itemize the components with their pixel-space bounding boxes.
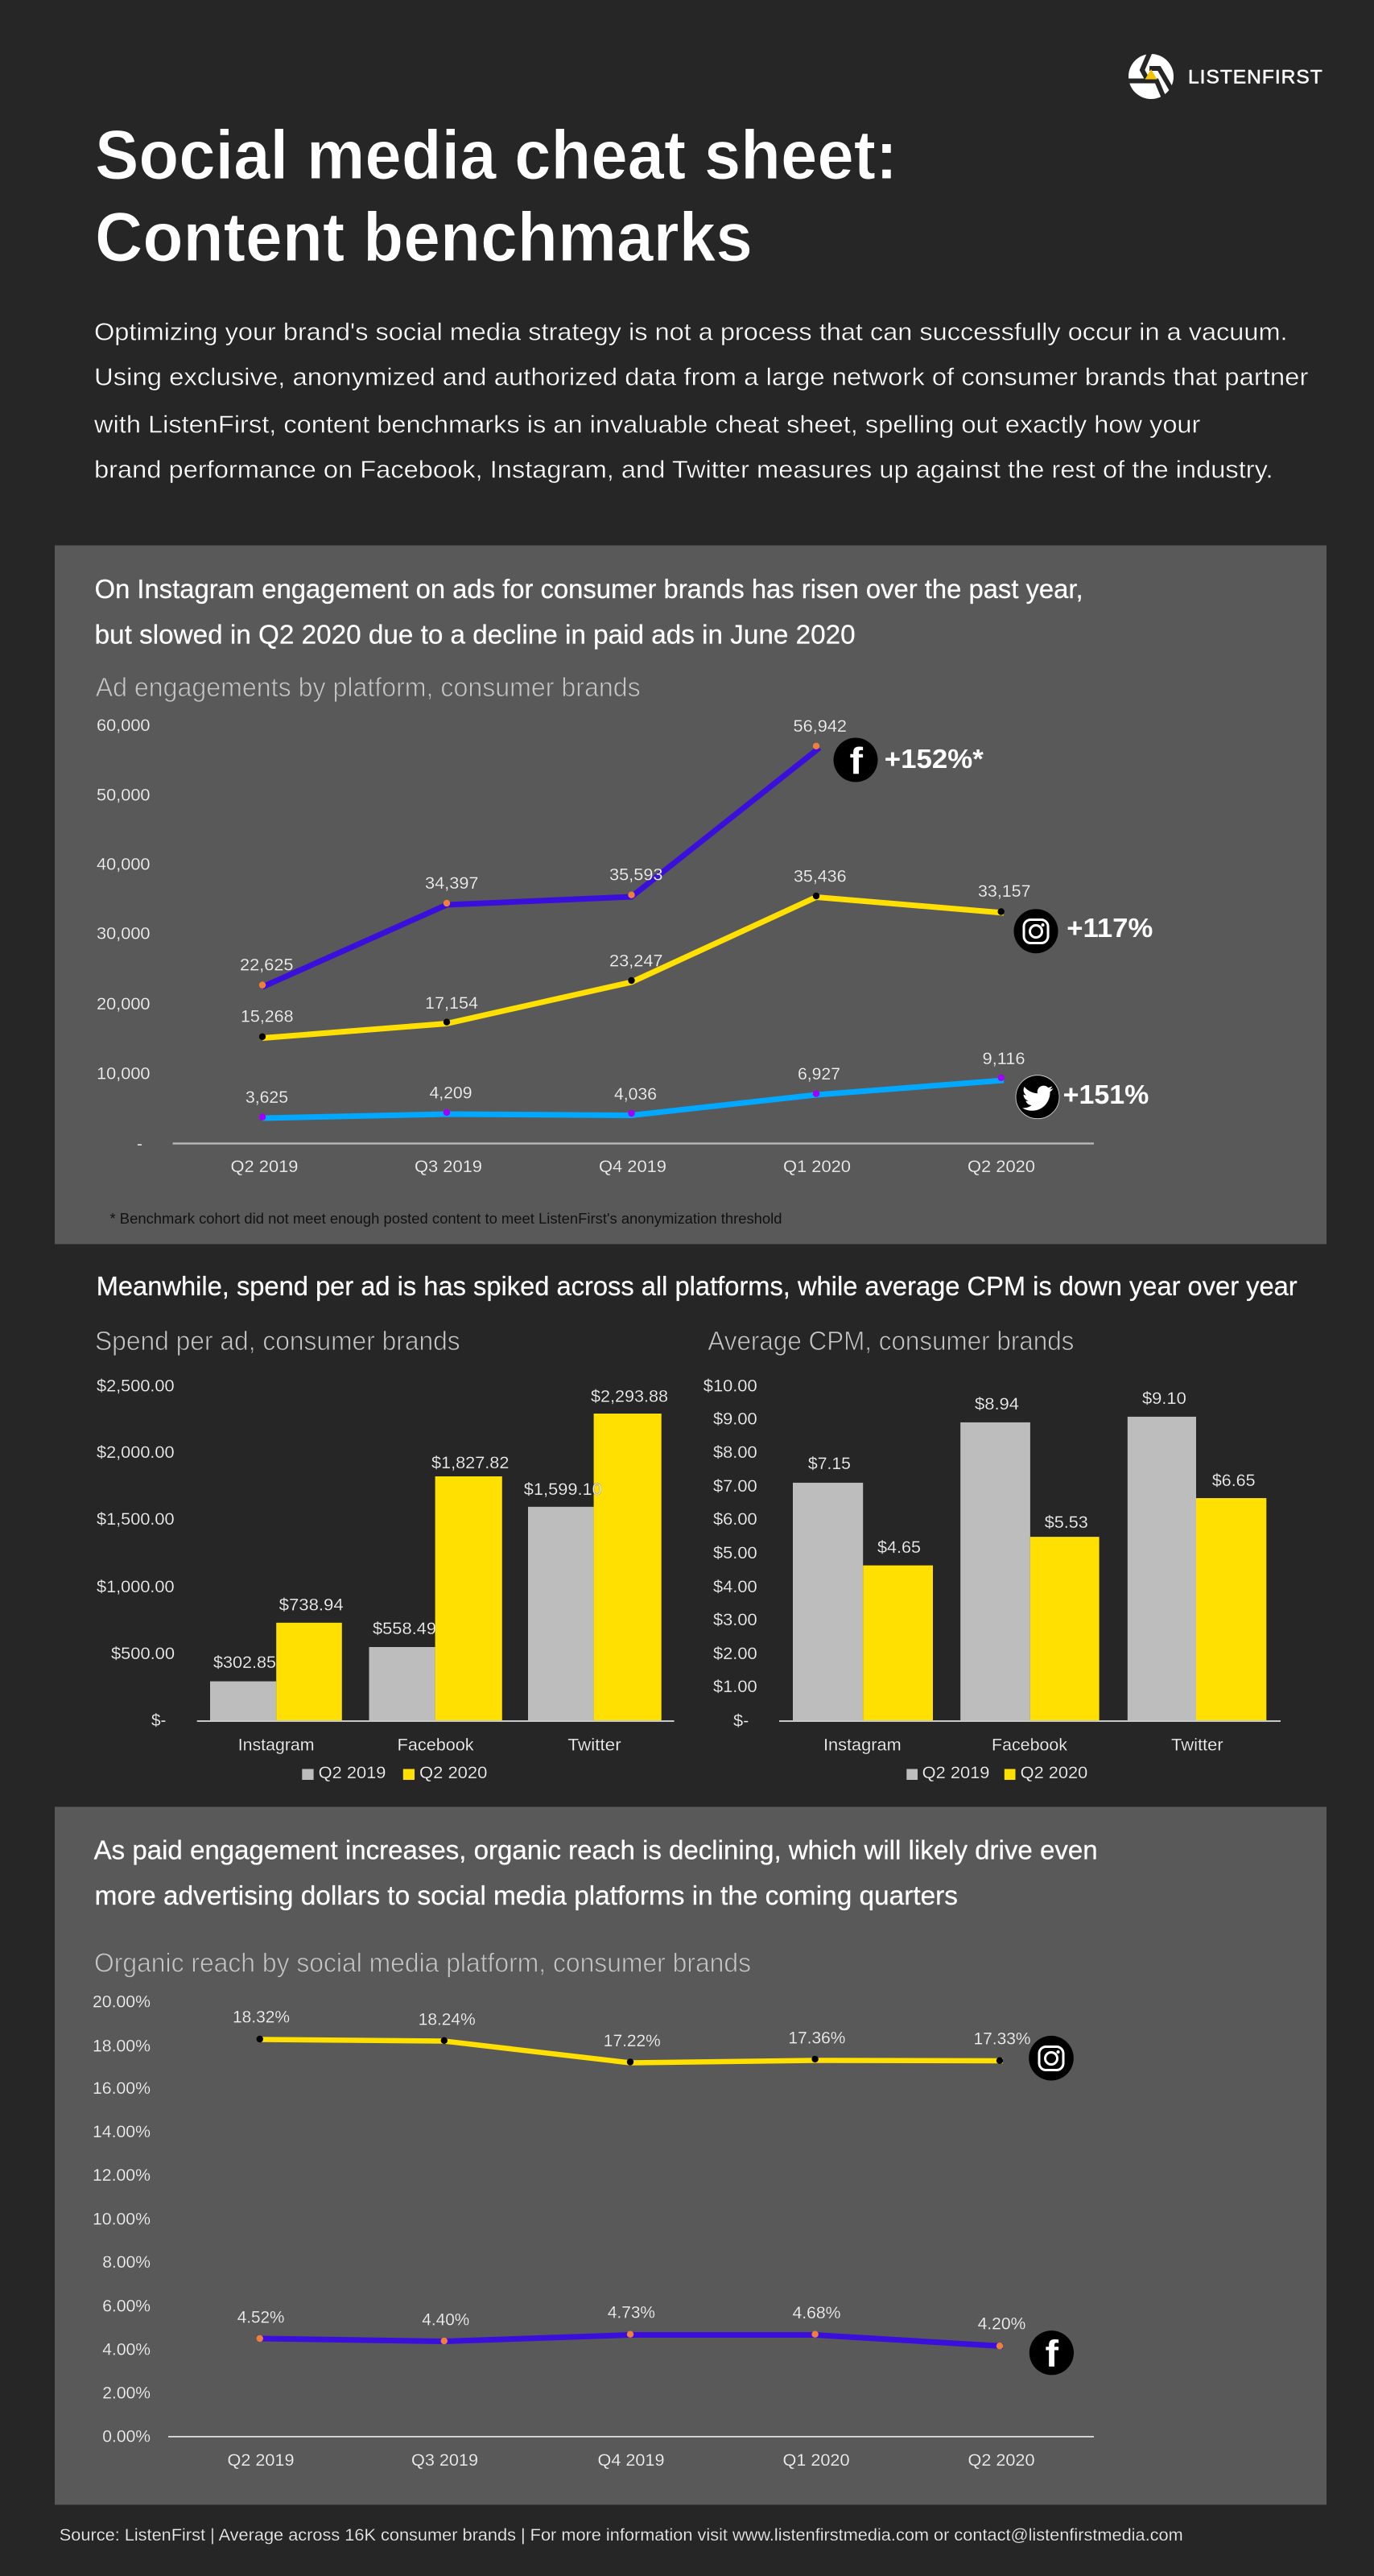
data labels: 4.40% [422, 2310, 469, 2330]
chart: spend per ad [95, 1326, 675, 1782]
icon: Instagram badge [1029, 2036, 1074, 2080]
data labels: 4,036 [614, 1085, 657, 1104]
data labels: 4.68% [792, 2304, 840, 2322]
category labels: Twitter [567, 1736, 621, 1755]
panel heading: On Instagram engagement on ads for consumer brands has risen over the past year, [95, 574, 1083, 604]
y axis labels: 10,000 [97, 1064, 150, 1084]
x axis labels: Q4 2019 [599, 1158, 666, 1176]
x axis labels [230, 1158, 1035, 1176]
logo: ListenFirst [1126, 52, 1322, 100]
data labels: 4.20% [978, 2315, 1025, 2333]
y axis labels: $2.00 [713, 1645, 757, 1663]
data labels: $558.49 [373, 1620, 436, 1638]
x axis labels: Q2 2019 [230, 1158, 298, 1176]
y axis labels: $1.00 [713, 1678, 757, 1696]
y axis labels: $10.00 [704, 1377, 757, 1395]
chart subtitle: Average CPM, consumer brands [708, 1326, 1074, 1356]
data labels: $2,293.88 [591, 1387, 668, 1406]
chart subtitle: Spend per ad, consumer brands [95, 1326, 460, 1356]
series: Facebook line [259, 743, 819, 989]
wordmark: LISTENFIRST [1188, 66, 1322, 88]
data labels: 4.52% [237, 2309, 284, 2326]
legend: Q2 2020 [1021, 1764, 1087, 1782]
data labels: 4.73% [608, 2304, 655, 2322]
category labels: Instagram [238, 1736, 315, 1755]
data labels: 3,625 [246, 1088, 288, 1107]
series: Instagram line [257, 2036, 1003, 2066]
x axis labels: Q2 2019 [227, 2451, 295, 2470]
icon: shutter mark [1126, 52, 1174, 100]
y axis labels: $4.00 [713, 1578, 757, 1596]
x axis labels: Q3 2019 [411, 2451, 478, 2470]
series: Facebook line [257, 2331, 1003, 2349]
title: Social media cheat sheet: [95, 117, 897, 194]
legend: Q2 2020 [419, 1764, 487, 1782]
y axis labels: 20,000 [97, 995, 150, 1013]
data labels: $6.65 [1212, 1472, 1256, 1490]
chart subtitle: Organic reach by social media platform, consumer brands [94, 1947, 751, 1977]
data labels: 22,625 [240, 956, 293, 974]
data labels: 17.36% [788, 2029, 845, 2047]
category labels: Facebook [398, 1736, 474, 1755]
x axis labels: Q3 2019 [415, 1158, 482, 1176]
y axis labels: 18.00% [93, 2037, 151, 2056]
category labels: Twitter [1171, 1736, 1223, 1755]
y axis labels: $- [733, 1711, 749, 1730]
data labels: $1,827.82 [431, 1454, 509, 1472]
callout: Twitter growth: +151% [1063, 1080, 1149, 1109]
panel: ad engagements [55, 546, 1327, 1245]
x axis labels: Q2 2020 [968, 1158, 1035, 1176]
data labels: $7.15 [808, 1455, 851, 1473]
panel heading: but slowed in Q2 2020 due to a decline in paid ads in June 2020 [95, 620, 856, 650]
footnote: * Benchmark cohort did not meet enough posted content to meet ListenFirst's anonymization threshold [109, 1210, 782, 1227]
intro text block: Optimizing your brand's social media strategy is not a process that can successfully occur in a vacuum. [94, 317, 1288, 346]
series: Twitter line [259, 1075, 1005, 1121]
intro text block [93, 317, 1308, 484]
y axis labels: 12.00% [93, 2166, 151, 2185]
chart: average CPM [704, 1326, 1281, 1782]
data labels: 33,157 [978, 882, 1030, 901]
y axis labels [93, 1992, 151, 2446]
bars: Q2 2020 [276, 1414, 662, 1721]
y axis labels: 10.00% [93, 2211, 151, 2228]
y axis labels: $1,000.00 [97, 1578, 175, 1596]
panel heading: more advertising dollars to social media platforms in the coming quarters [95, 1880, 958, 1910]
y axis labels: 2.00% [102, 2384, 151, 2402]
data labels [213, 1387, 668, 1672]
data labels: 15,268 [241, 1008, 293, 1026]
y axis labels: 0.00% [102, 2427, 151, 2446]
panel heading: As paid engagement increases, organic reach is declining, which will likely drive even [94, 1835, 1098, 1864]
category labels [238, 1736, 621, 1755]
data labels: $738.94 [279, 1596, 344, 1614]
chart subtitle: Ad engagements by platform, consumer brands [96, 672, 641, 702]
legend [906, 1764, 1087, 1782]
y axis labels: - [137, 1135, 142, 1154]
footer source line: Source: ListenFirst | Average across 16K consumer brands | For more information visit www.listenfirstmedia.com or contact@listenfirstmedia.com [60, 2526, 1183, 2545]
data labels: $4.65 [877, 1538, 921, 1557]
y axis labels: 50,000 [97, 786, 150, 805]
section heading: spend and CPM: Meanwhile, spend per ad is has spiked across all platforms, while average CPM is down year over year [97, 1271, 1298, 1301]
title: Content benchmarks [95, 199, 753, 276]
y axis labels: 6.00% [102, 2297, 151, 2315]
data labels: $302.85 [213, 1653, 276, 1672]
bars: Q2 2019 [210, 1507, 594, 1721]
y axis labels: $6.00 [713, 1510, 757, 1529]
x axis labels: Q4 2019 [597, 2451, 665, 2470]
y axis labels: $2,500.00 [97, 1377, 175, 1396]
icon: Instagram badge [1014, 909, 1058, 953]
y axis labels: $7.00 [713, 1477, 757, 1496]
data labels: $5.53 [1045, 1513, 1088, 1532]
y axis labels: 14.00% [93, 2123, 151, 2141]
legend: Q2 2019 [922, 1764, 989, 1782]
callout: Facebook growth: +152%* [885, 744, 984, 774]
data labels: 9,116 [982, 1050, 1025, 1068]
data labels: $8.94 [975, 1395, 1019, 1414]
icon: Twitter badge [1016, 1075, 1059, 1119]
y axis labels: $3.00 [713, 1611, 757, 1629]
icon: Facebook badge [1029, 2330, 1074, 2375]
category labels: Instagram [823, 1736, 902, 1755]
panel heading [94, 1835, 1098, 1910]
y axis labels: $9.00 [713, 1410, 757, 1428]
y axis labels [704, 1377, 757, 1730]
data labels: 4,209 [430, 1084, 472, 1103]
data labels: 6,927 [798, 1065, 840, 1084]
y axis labels: 30,000 [97, 924, 150, 943]
legend [302, 1764, 487, 1782]
intro text block: brand performance on Facebook, Instagram, and Twitter measures up against the rest of the industry. [94, 456, 1273, 484]
category labels: Facebook [992, 1736, 1067, 1755]
x axis labels: Q1 2020 [783, 1158, 851, 1176]
y axis labels: $- [151, 1711, 166, 1730]
y axis labels [97, 716, 150, 1154]
data labels: 23,247 [609, 952, 663, 971]
x axis labels [227, 2451, 1035, 2470]
data labels: 35,593 [609, 866, 663, 884]
panel heading [95, 574, 1083, 650]
x axis labels: Q2 2020 [968, 2451, 1035, 2470]
data labels: 17.33% [974, 2030, 1030, 2048]
data labels [240, 717, 1030, 1107]
y axis labels: $8.00 [713, 1443, 757, 1462]
data labels: 35,436 [794, 868, 847, 886]
category labels [823, 1736, 1223, 1755]
title [95, 117, 897, 276]
y axis labels: $2,000.00 [97, 1443, 175, 1462]
legend: Q2 2019 [319, 1764, 386, 1782]
icon: Facebook badge: f [850, 740, 864, 782]
y axis labels: 4.00% [102, 2340, 151, 2359]
panel: organic reach [55, 1806, 1327, 2505]
data labels: 56,942 [794, 717, 847, 736]
x axis labels: Q1 2020 [782, 2451, 850, 2470]
y axis labels: 40,000 [97, 855, 150, 874]
icon: Facebook badge: f [1045, 2333, 1059, 2375]
callout: Instagram growth: +117% [1067, 913, 1153, 943]
bars: Q2 2019 [793, 1417, 1196, 1721]
y axis labels: $1,500.00 [97, 1510, 175, 1529]
y axis labels: $500.00 [111, 1645, 175, 1663]
y axis labels [97, 1377, 175, 1730]
data labels: $1,599.10 [524, 1480, 602, 1499]
data labels: 34,397 [425, 874, 478, 893]
intro text block: with ListenFirst, content benchmarks is an invaluable cheat sheet, spelling out exactly how your [93, 411, 1200, 438]
bars: Q2 2020 [863, 1498, 1266, 1721]
intro text block: Using exclusive, anonymized and authorized data from a large network of consumer brands that partner [94, 363, 1308, 391]
data labels [808, 1389, 1256, 1557]
data labels: 17,154 [425, 994, 478, 1013]
data labels: 17.22% [604, 2032, 661, 2050]
y axis labels: 16.00% [93, 2079, 151, 2098]
y axis labels: 60,000 [97, 716, 150, 735]
icon: Facebook badge [834, 737, 877, 782]
data labels: 18.32% [233, 2008, 290, 2026]
data labels: 18.24% [419, 2010, 476, 2029]
y axis labels: $5.00 [713, 1544, 757, 1563]
series: Instagram line [259, 893, 1005, 1040]
data labels [233, 2008, 1030, 2333]
y axis labels: 20.00% [93, 1992, 151, 2011]
y axis labels: 8.00% [102, 2253, 151, 2272]
data labels: $9.10 [1142, 1389, 1186, 1408]
